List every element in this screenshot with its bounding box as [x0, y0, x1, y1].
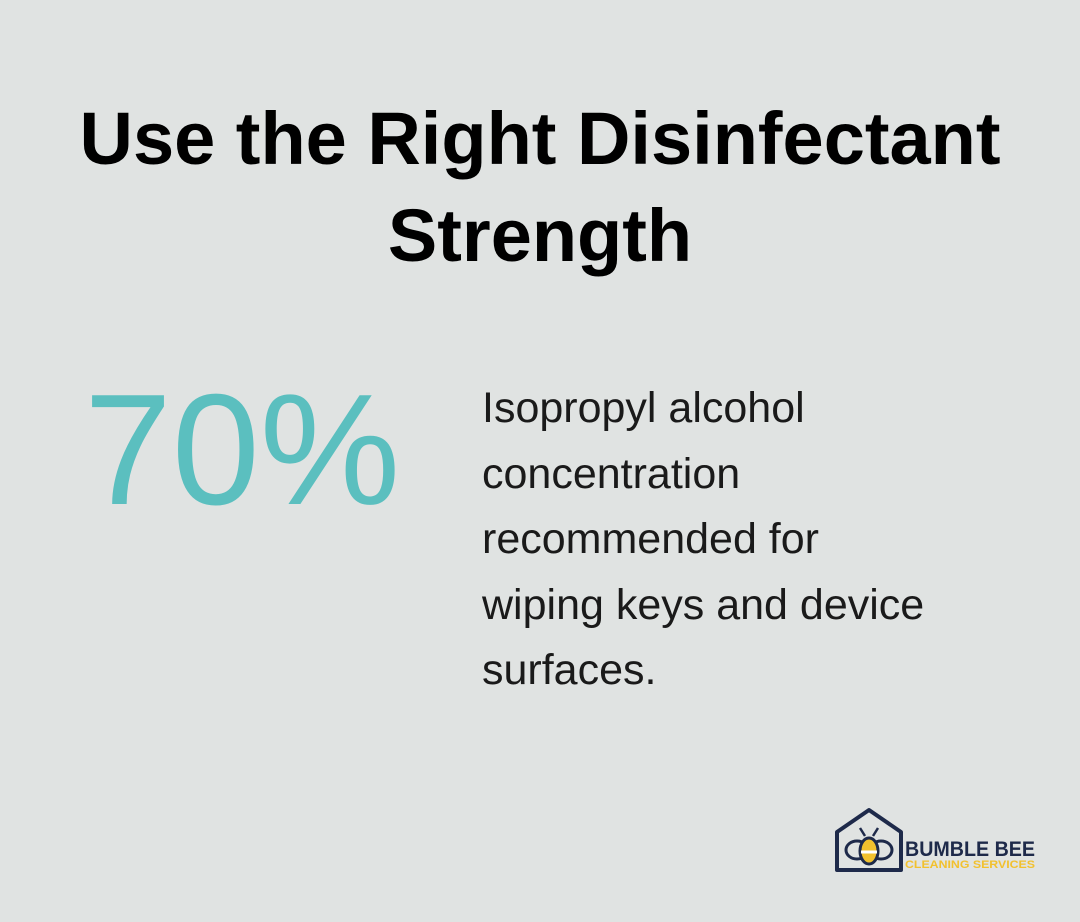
description text: recommended for — [482, 515, 819, 563]
logo: Bumble Bee Cleaning Services — [835, 808, 1035, 872]
description text: Isopropyl alcohol — [482, 384, 805, 432]
title: Use the Right Disinfectant — [80, 97, 1000, 180]
logo text: CLEANING SERVICES — [905, 859, 1035, 871]
description text: surfaces. — [482, 646, 656, 694]
logo text: BUMBLE BEE — [905, 838, 1035, 861]
description text: concentration — [482, 450, 740, 498]
description text: wiping keys and device — [482, 580, 924, 628]
logo text — [905, 838, 1035, 871]
stat: 70%: 70% — [84, 362, 400, 538]
title — [80, 97, 1000, 277]
title: Strength — [388, 194, 692, 277]
icon: house with bee — [837, 810, 901, 870]
description text — [482, 384, 924, 694]
